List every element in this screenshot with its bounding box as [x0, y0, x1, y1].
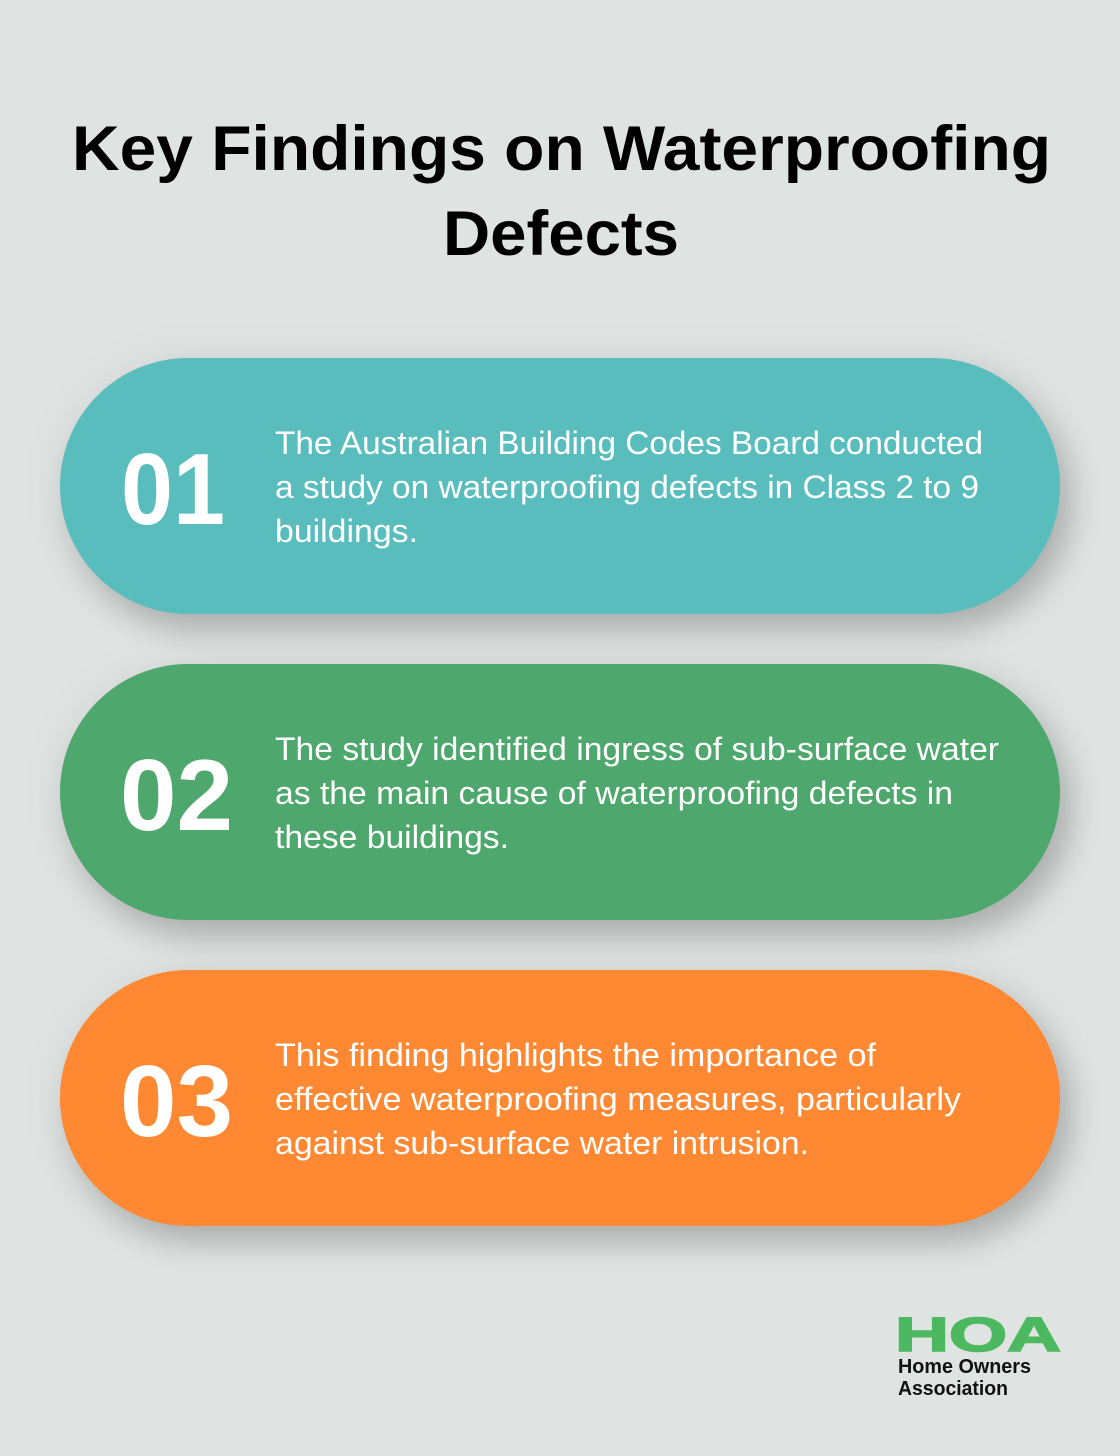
text block: finding 02: The study identified ingress of sub-surface water: [275, 731, 999, 767]
text block: finding 02: these buildings.: [275, 819, 509, 855]
panel: finding 03: [60, 970, 1060, 1226]
number 01: 01: [121, 434, 225, 546]
text block: finding 02: [275, 731, 999, 855]
panel: finding 02: [60, 664, 1060, 920]
text block: finding 01: [275, 425, 983, 549]
text block: finding 01: a study on waterproofing defects in Class 2 to 9: [275, 469, 979, 505]
text block: finding 01: The Australian Building Codes Board conducted: [275, 425, 983, 461]
text block: finding 03: effective waterproofing measures, particularly: [275, 1081, 962, 1117]
text block: finding 03: [275, 1037, 962, 1161]
title: Defects: [443, 199, 679, 269]
title: [72, 114, 1051, 269]
text block: finding 01: buildings.: [275, 513, 418, 549]
panel: finding 01: [60, 358, 1060, 614]
logo: Home Owners Association: Home Owners: [898, 1356, 1031, 1378]
logo: Home Owners Association: [895, 1309, 1061, 1400]
text block: finding 02: as the main cause of waterproofing defects in: [275, 775, 953, 811]
logo: Home Owners Association: Association: [898, 1378, 1008, 1400]
number 03: 03: [120, 1046, 233, 1158]
number 02: 02: [120, 740, 233, 852]
text block: finding 03: against sub-surface water intrusion.: [275, 1125, 809, 1161]
text block: finding 03: This finding highlights the importance of: [275, 1037, 877, 1073]
logo: Home Owners Association: HOA: [895, 1309, 1061, 1362]
title: Key Findings on Waterproofing: [72, 114, 1051, 184]
